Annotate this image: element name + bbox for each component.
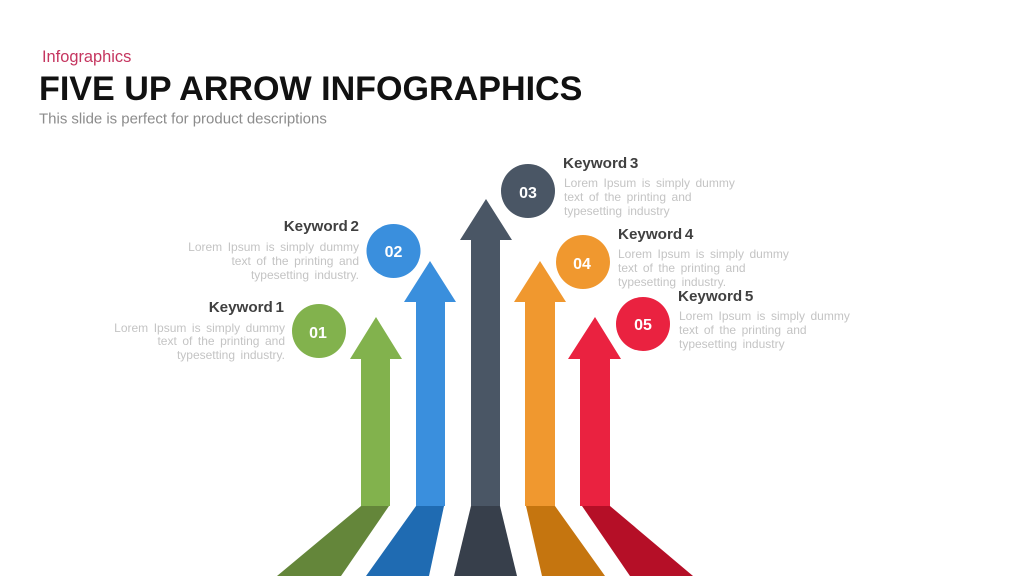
text block: keyword 5: [678, 288, 850, 351]
text block: keyword 1: [114, 299, 285, 362]
text block: keyword 4: Lorem Ipsum is simply dummy: [618, 247, 789, 261]
text block: keyword 2: typesetting industry.: [251, 268, 359, 282]
text block: keyword 1: typesetting industry.: [177, 348, 285, 362]
arrow 1: green: [277, 317, 402, 576]
text block: keyword 5: text of the printing and: [679, 323, 807, 337]
text block: keyword 3: text of the printing and: [564, 190, 692, 204]
text block: keyword 3: Keyword 3: [563, 155, 638, 172]
text block: keyword 4: [618, 226, 789, 289]
badge 01: [292, 304, 346, 358]
badge 04: [556, 235, 610, 289]
badge 04: 04: [573, 256, 591, 273]
text block: keyword 4: Keyword 4: [618, 226, 694, 243]
badge 03: 03: [519, 185, 537, 202]
text block: keyword 3: typesetting industry: [564, 204, 670, 218]
badge 02: [366, 224, 420, 278]
text block: keyword 2: [188, 218, 359, 282]
text block: keyword 1: Lorem Ipsum is simply dummy: [114, 321, 285, 335]
text block: keyword 2: Lorem Ipsum is simply dummy: [188, 240, 359, 254]
text block: keyword 1: text of the printing and: [157, 334, 285, 348]
badge 05: 05: [634, 317, 652, 334]
text block: keyword 2: Keyword 2: [284, 218, 359, 235]
text block: keyword 4: text of the printing and: [618, 261, 746, 275]
text block: keyword 5: Keyword 5: [678, 288, 754, 305]
badge 05: [616, 297, 670, 351]
arrow 4: orange: [514, 261, 605, 576]
label: Infographics: Infographics: [42, 48, 131, 66]
badge 02: 02: [385, 244, 402, 261]
arrow 2: blue: [366, 261, 456, 576]
arrow 3: dark slate: [454, 199, 517, 576]
text block: keyword 5: Lorem Ipsum is simply dummy: [679, 309, 850, 323]
badge 01: 01: [309, 325, 327, 342]
text block: keyword 3: Lorem Ipsum is simply dummy: [564, 176, 735, 190]
text block: keyword 3: [563, 155, 735, 218]
badge 03: [501, 164, 555, 218]
text block: keyword 1: Keyword 1: [209, 299, 285, 316]
title: FIVE UP ARROW INFOGRAPHICS: [39, 70, 582, 108]
subtitle: This slide is perfect for product descriptions: [39, 110, 327, 128]
text block: keyword 5: typesetting industry: [679, 337, 785, 351]
text block: keyword 2: text of the printing and: [231, 254, 359, 268]
text block: keyword 4: typesetting industry.: [618, 275, 726, 289]
arrow 5: red: [568, 317, 693, 576]
